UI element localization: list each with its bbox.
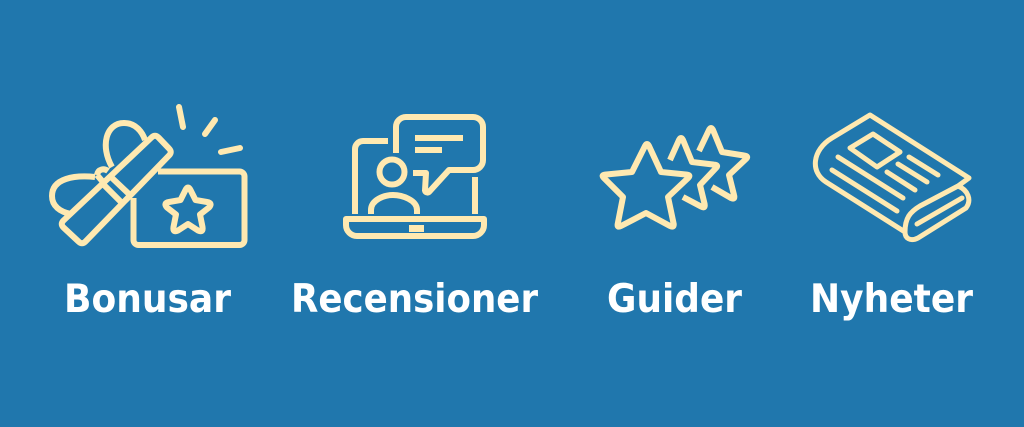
ribbon band [103, 177, 131, 203]
newspaper outline [815, 115, 969, 240]
fold inner line [917, 198, 962, 224]
star on box [165, 188, 211, 231]
newspaper text lines [832, 157, 938, 211]
icon: three stars [603, 128, 747, 227]
gift box body [134, 172, 244, 245]
label: Recensioner: Recensioner [291, 276, 538, 322]
label: Bonusar: Bonusar [64, 276, 231, 322]
sparkle rays [179, 107, 240, 152]
laptop screen [355, 141, 475, 214]
ribbon bow [52, 123, 145, 214]
presenter shoulders [371, 195, 417, 214]
icon: folded newspaper [815, 115, 969, 240]
gift box lid [62, 136, 171, 243]
icon: open gift box [52, 107, 244, 245]
label: Guider: Guider [607, 276, 742, 322]
speech bubble [396, 117, 483, 193]
middle star [670, 138, 717, 207]
icon: laptop with presenter and speech bubble [346, 117, 484, 236]
label: Nyheter: Nyheter [810, 276, 973, 322]
large star [603, 144, 689, 227]
laptop base [346, 219, 484, 236]
back star [699, 128, 747, 199]
laptop trackpad notch [409, 225, 424, 232]
speech bubble text lines [415, 138, 463, 150]
presenter head [380, 160, 404, 184]
newspaper photo [850, 134, 900, 167]
